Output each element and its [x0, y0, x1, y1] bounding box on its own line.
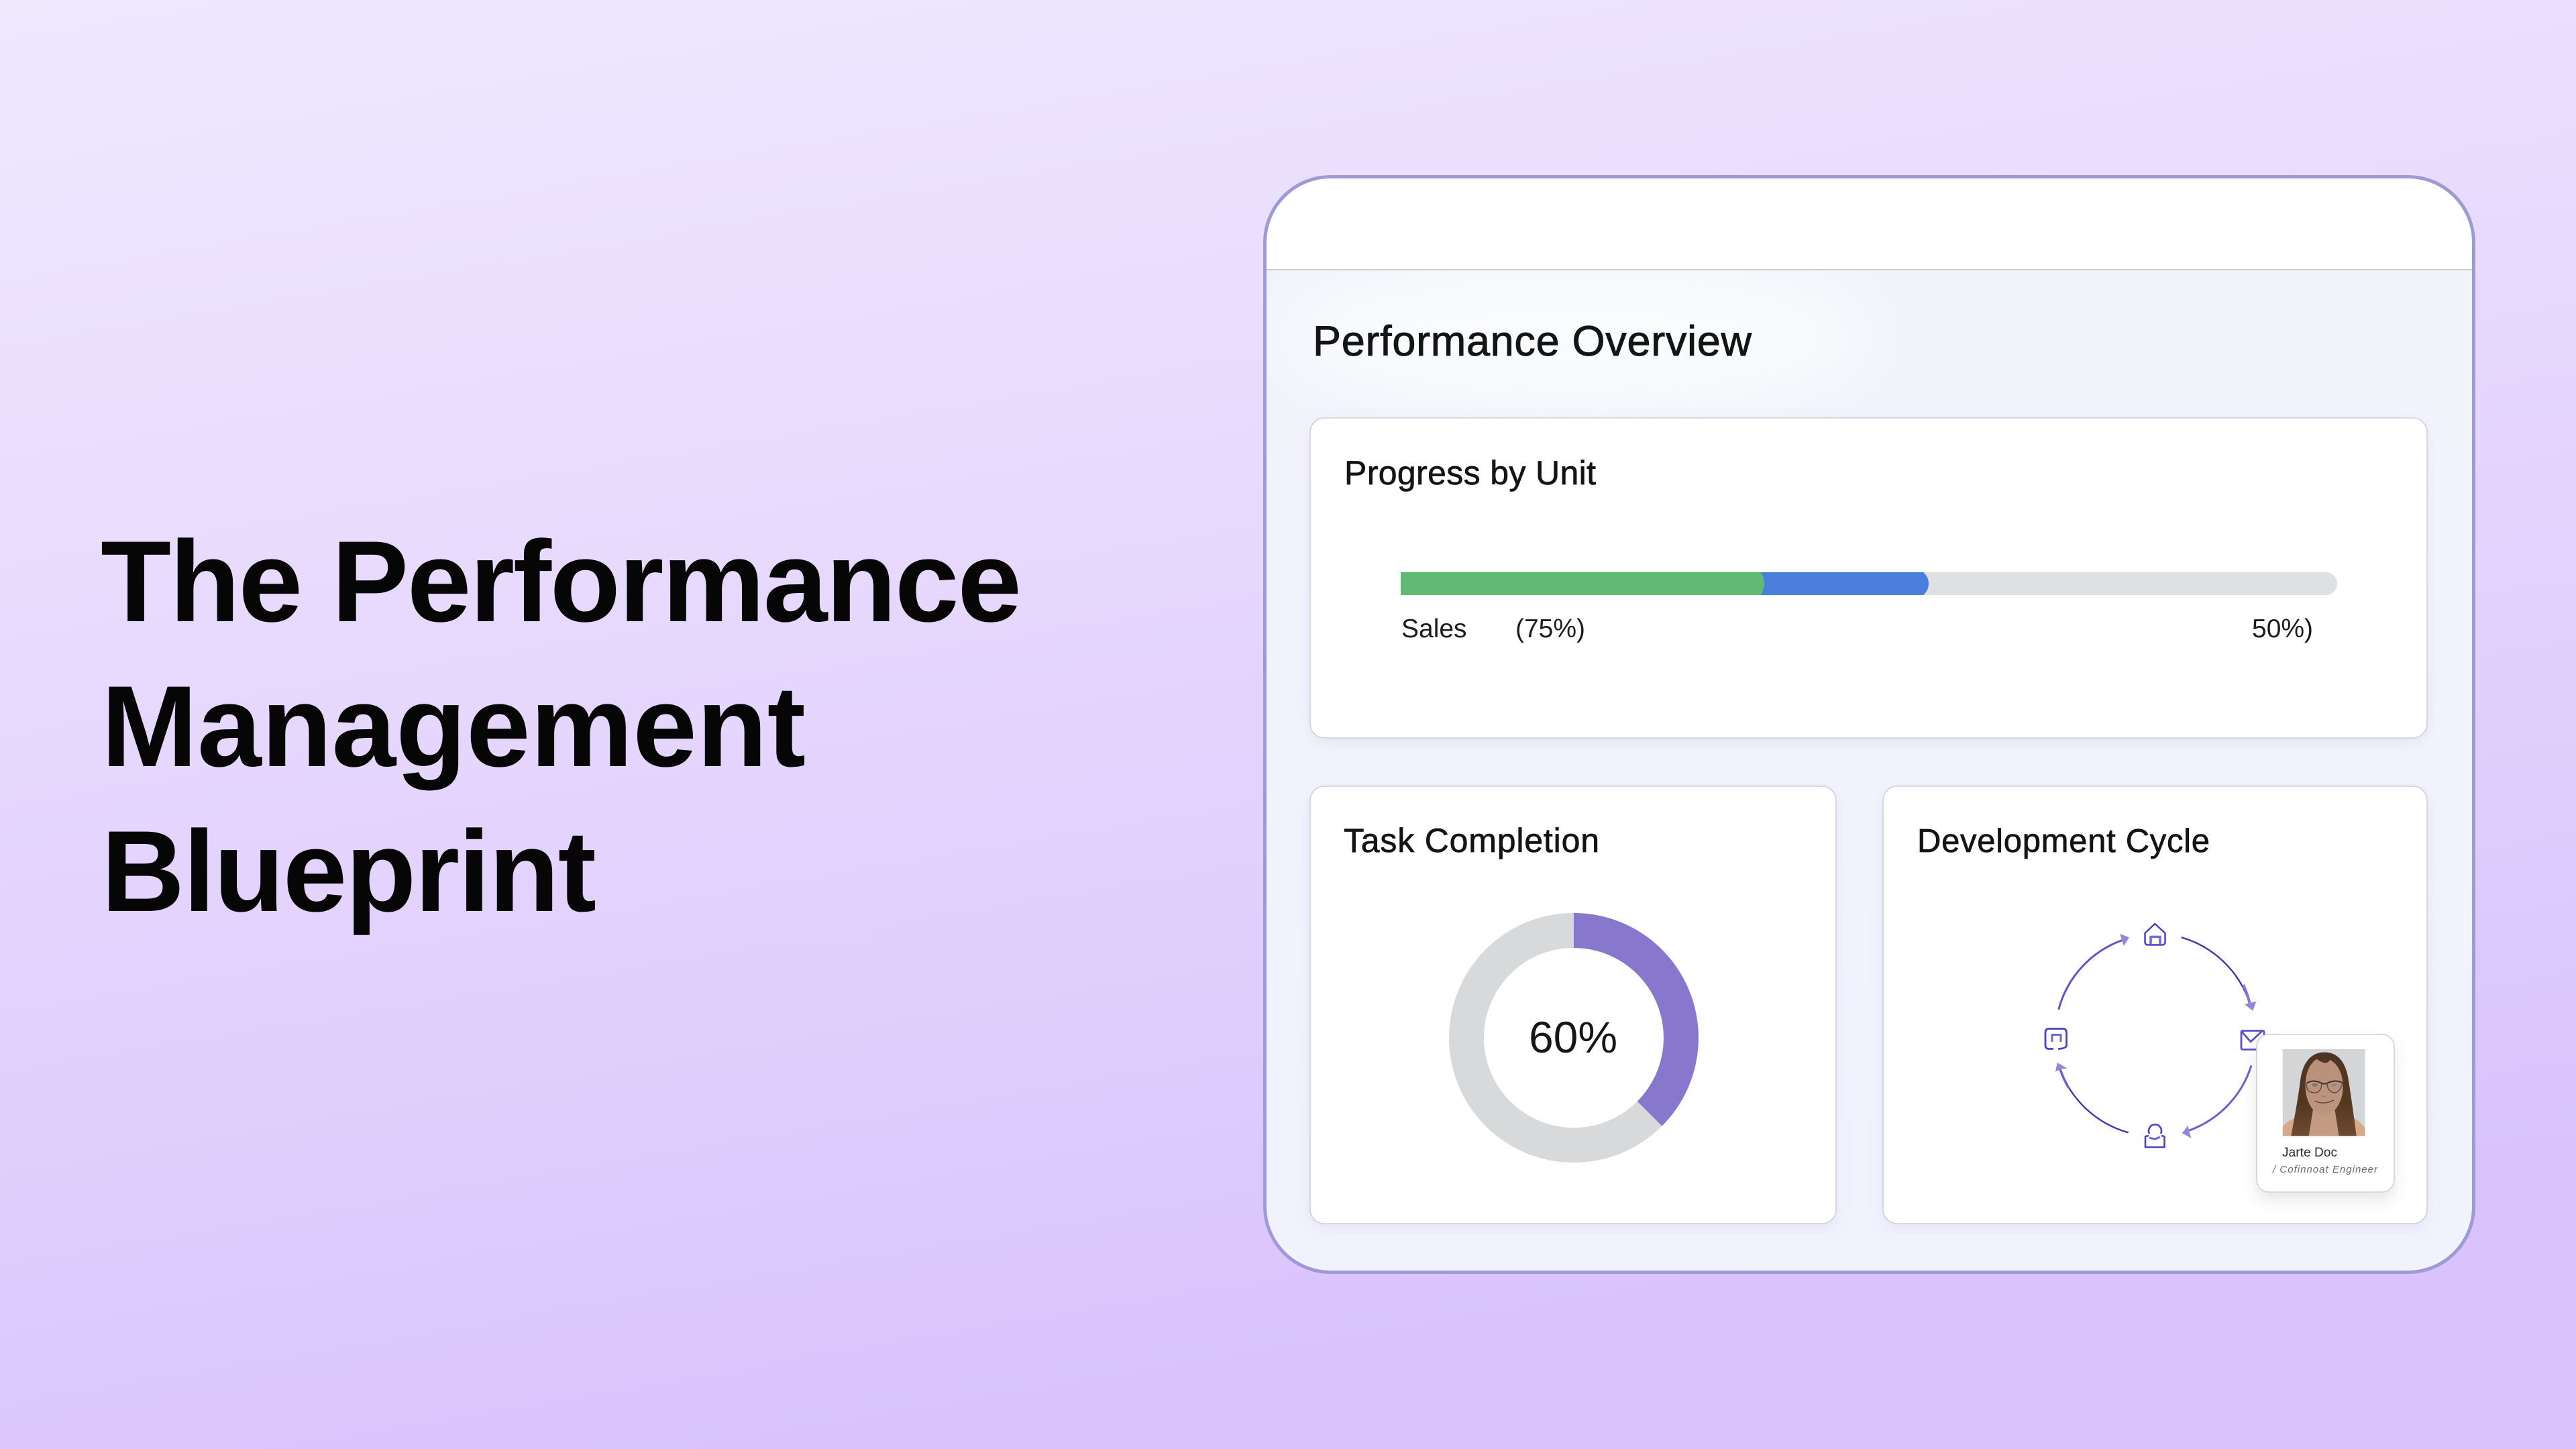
- name: Jarte Doc: [2282, 1146, 2337, 1160]
- icon: envelope: [2241, 1030, 2264, 1049]
- icon: person: [2145, 1124, 2164, 1147]
- label: 50%: 50%): [2252, 614, 2313, 643]
- donut chart: [1466, 930, 1681, 1145]
- arrow: right to bottom: [2182, 1065, 2251, 1138]
- icon: document: [2045, 1029, 2066, 1049]
- panel: Task Completion: [1310, 786, 1836, 1224]
- title: Management: [101, 662, 806, 791]
- arrow: bottom to left: [2055, 1063, 2129, 1132]
- heading: Performance Overview: Performance Overview: [1313, 318, 1752, 365]
- title: [101, 517, 1022, 936]
- profile card: [2257, 1034, 2394, 1192]
- heading: Task Completion: Task Completion: [1344, 822, 1599, 859]
- progress bar: [1401, 572, 2337, 595]
- title: The Performance: [101, 517, 1022, 646]
- portrait photo: [2282, 1049, 2365, 1136]
- cycle diagram: [2045, 924, 2264, 1147]
- arrow: left to top: [2059, 934, 2129, 1010]
- panel: Development Cycle: [1883, 786, 2427, 1224]
- heading: Progress by Unit: Progress by Unit: [1344, 454, 1596, 492]
- title: Blueprint: [101, 807, 596, 936]
- panel: Progress by Unit: [1310, 418, 2427, 738]
- label: Sales: Sales: [1401, 614, 1467, 643]
- value: 60%: 60%: [1529, 1012, 1617, 1062]
- label: 75%: (75%): [1515, 614, 1585, 643]
- icon: house: [2145, 924, 2165, 945]
- panel: dashboard window: [1265, 176, 2474, 1273]
- role: / Cofinnoat Engineer: [2272, 1164, 2378, 1175]
- heading: Development Cycle: Development Cycle: [1917, 823, 2210, 859]
- arrow: top to right: [2182, 937, 2256, 1011]
